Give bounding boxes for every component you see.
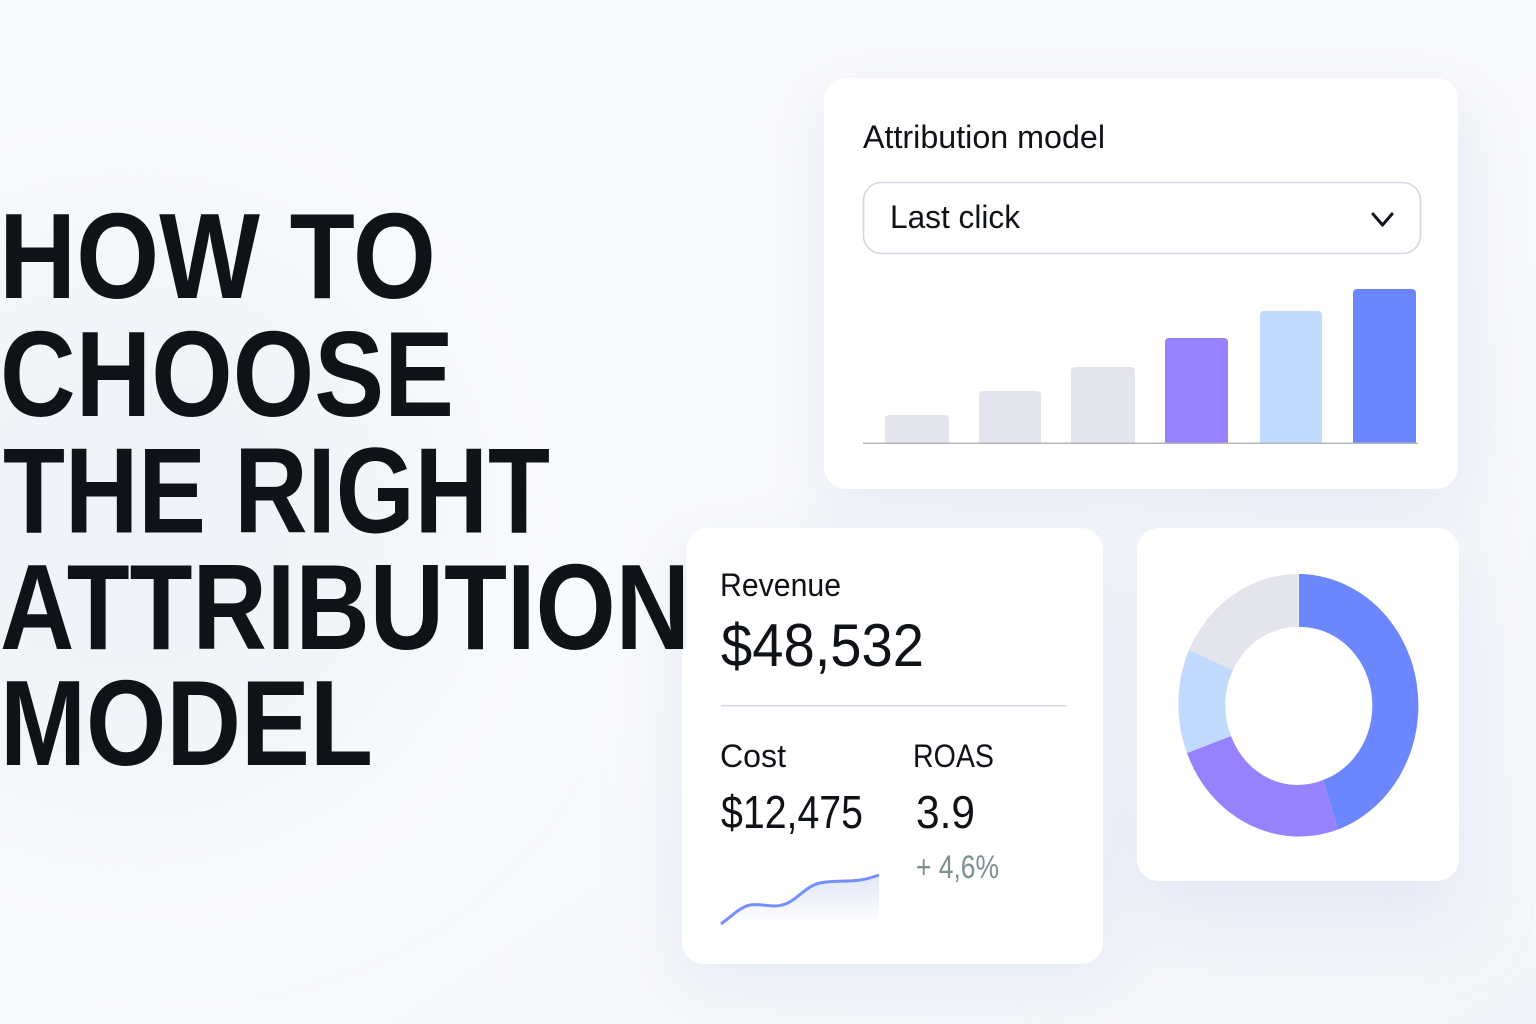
roas label: ROAS xyxy=(913,738,994,774)
title: ATTRIBUTION xyxy=(0,539,690,675)
bar chart xyxy=(863,289,1418,444)
title: CHOOSE xyxy=(0,306,454,442)
title: THE RIGHT xyxy=(3,422,550,558)
dropdown xyxy=(864,182,1420,254)
dropdown value: Last click xyxy=(890,199,1021,235)
title xyxy=(0,188,690,791)
roas change: + 4,6% xyxy=(916,849,999,885)
sparkline xyxy=(721,875,879,925)
cost value: $12,475 xyxy=(721,786,863,838)
icon: chevron xyxy=(1373,214,1392,225)
revenue value: $48,532 xyxy=(721,612,924,679)
roas value: 3.9 xyxy=(916,786,975,838)
title: HOW TO xyxy=(0,188,436,324)
donut chart xyxy=(1178,574,1418,837)
heading: attribution model: Attribution model xyxy=(863,119,1105,155)
revenue label: Revenue xyxy=(720,567,841,603)
cost label: Cost xyxy=(720,738,786,774)
panel: donut chart xyxy=(1137,528,1459,881)
title: MODEL xyxy=(0,655,373,791)
panel: metrics xyxy=(682,528,1103,964)
panel: attribution model xyxy=(824,78,1458,489)
